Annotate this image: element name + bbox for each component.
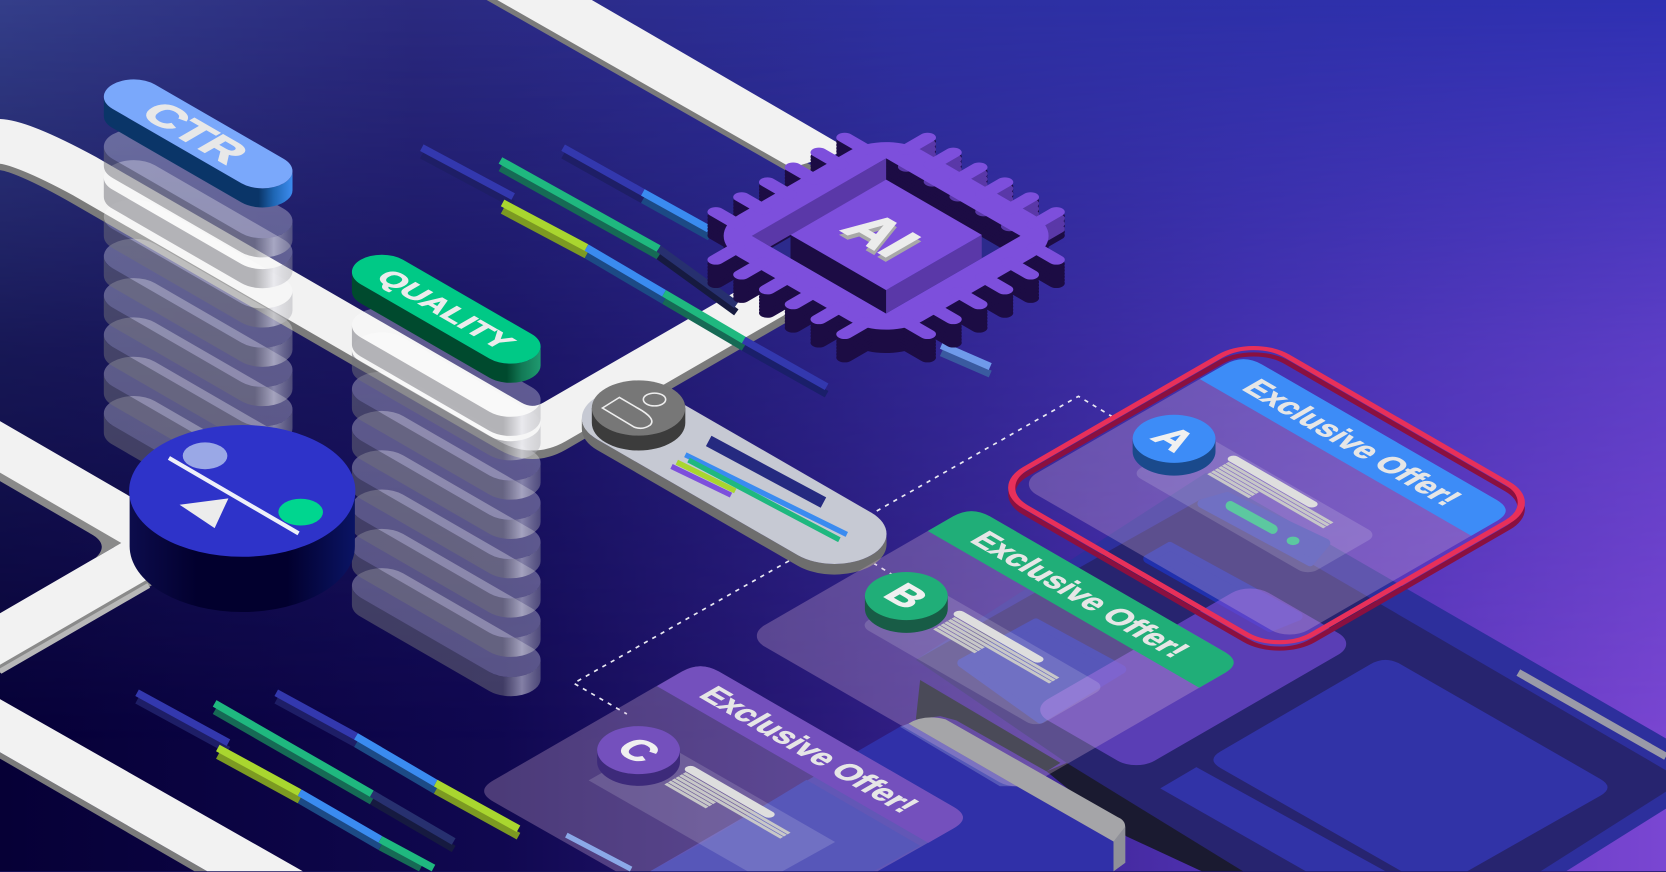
data strips: upper group <box>422 148 990 394</box>
label: AI: AI <box>828 209 933 269</box>
heading: Exclusive Offer! (C): Exclusive Offer! <box>692 681 927 817</box>
label: AI: AI <box>828 205 933 265</box>
heading: Exclusive Offer! (B): Exclusive Offer! <box>963 526 1198 662</box>
road: top conveyor <box>487 0 850 183</box>
card B <box>746 506 1243 793</box>
capsule bars <box>672 441 847 540</box>
device: tablet screen <box>1160 660 1608 871</box>
road: left junction <box>0 435 166 672</box>
badge: A <box>1133 415 1216 476</box>
panel: purple shadow under card A <box>1029 582 1357 771</box>
badge: C: C <box>606 731 671 769</box>
pill: QUALITY <box>340 248 553 383</box>
red frame <box>992 337 1541 660</box>
device: blue panel below card B <box>650 724 1114 871</box>
heading: Exclusive Offer! (A): Exclusive Offer! <box>1235 374 1470 510</box>
dashed connector <box>574 396 1121 714</box>
green call to action <box>1230 506 1299 545</box>
pill: CTR <box>91 72 305 207</box>
icon: balance cylinder <box>129 425 355 612</box>
card A with red highlight <box>992 337 1541 660</box>
data strips: lower group <box>137 693 518 868</box>
pill: QUALITY: QUALITY <box>368 266 521 354</box>
device: gray wall and strip <box>908 680 1125 871</box>
panel: user capsule <box>560 376 908 576</box>
badge: B <box>865 572 948 633</box>
stack: QUALITY pill column <box>340 248 553 696</box>
icon: user avatar <box>592 380 685 451</box>
stack: CTR pill column <box>91 72 305 524</box>
badge: B: B <box>874 577 939 615</box>
device: screen patches behind the cards <box>962 496 1326 719</box>
pill: CTR: CTR <box>131 95 260 170</box>
icon: AI chip <box>674 114 1098 381</box>
road: conveyor through pills to chip <box>0 141 818 437</box>
badge: A: A <box>1142 420 1207 458</box>
road: bottom left <box>0 699 303 871</box>
badge: C <box>597 726 680 786</box>
card C <box>484 661 972 871</box>
device: large tablet base <box>916 473 1666 871</box>
